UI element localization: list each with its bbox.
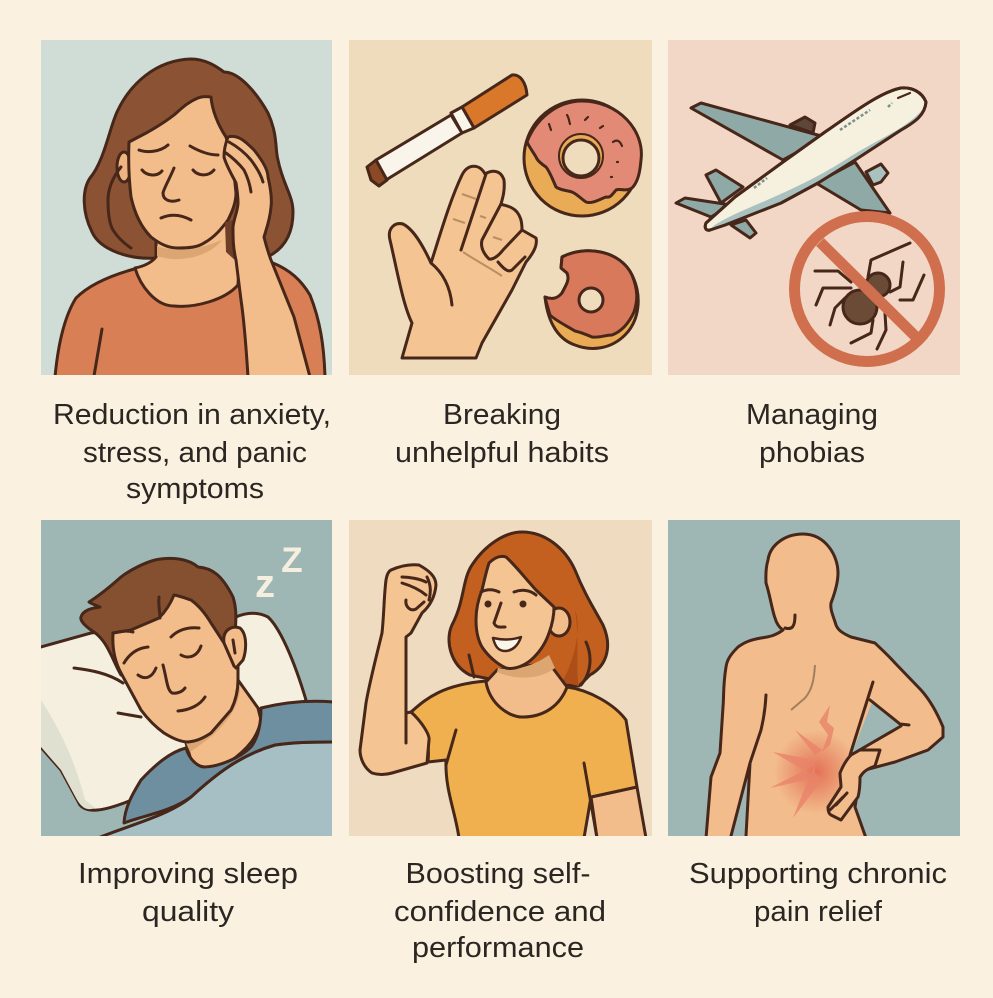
icon: hair shadow xyxy=(562,610,579,686)
label: pain: pain relief xyxy=(754,896,883,928)
text: zzz: Z xyxy=(281,541,303,580)
icon: arm right xyxy=(591,787,646,838)
icon: body xyxy=(706,534,943,838)
shadow: neck xyxy=(186,680,240,752)
icon: torso lines xyxy=(731,615,909,836)
icon: neck xyxy=(186,680,261,767)
text: zzz xyxy=(256,548,302,597)
icon: face xyxy=(113,595,238,742)
icon: cigarette xyxy=(367,75,527,186)
panel: habits xyxy=(349,40,652,375)
label: phobias xyxy=(746,399,878,469)
icon: airplane xyxy=(676,88,926,238)
label: pain xyxy=(689,858,947,928)
shadow: neck xyxy=(497,655,555,678)
icon: pillow creases xyxy=(74,668,141,717)
icon: neck xyxy=(486,663,567,717)
label: pain: Supporting chronic xyxy=(689,858,947,890)
label: phobias: Managing xyxy=(746,399,878,431)
shadow: under chin xyxy=(157,240,222,259)
icon: hand on hip xyxy=(828,750,880,820)
label: sleep xyxy=(78,858,298,928)
icon: finger lines xyxy=(431,174,525,305)
shadow: pillow xyxy=(41,700,95,809)
label: sleep: Improving sleep xyxy=(78,858,298,890)
icon: hair xyxy=(81,558,236,675)
label: habits: unhelpful habits xyxy=(395,437,609,469)
label: habits: Breaking xyxy=(443,399,561,431)
icon: underarm gap xyxy=(851,700,901,755)
icon: facial features xyxy=(94,145,218,376)
icon: hair sliver xyxy=(225,220,234,260)
icon: donut top xyxy=(524,100,641,216)
icon: face details xyxy=(469,590,590,685)
panel: phobias xyxy=(668,40,960,375)
icon: pillow xyxy=(30,613,306,810)
icon: hand xyxy=(389,166,536,358)
panel: pain xyxy=(668,520,960,838)
icon: ear xyxy=(548,608,570,636)
icon: hair xyxy=(84,59,293,262)
icon: shirt xyxy=(55,263,325,377)
icon: hand finger lines xyxy=(830,793,847,810)
panel: sleep xyxy=(30,520,334,840)
label: phobias: phobias xyxy=(759,437,865,469)
glow: pain burst xyxy=(770,705,858,818)
icon: shirt fold lines xyxy=(446,730,597,838)
label: confidence: performance xyxy=(412,932,584,964)
icon: hair strand xyxy=(108,167,131,248)
icon: raised arm with fist xyxy=(360,565,436,774)
label: sleep: quality xyxy=(142,896,235,928)
icon: shirt xyxy=(411,681,637,838)
icon: hair fringe lines xyxy=(113,597,160,633)
label: habits xyxy=(395,399,609,469)
text: zzz: z xyxy=(255,562,275,606)
icon: no spider sign xyxy=(794,216,940,362)
icon: face xyxy=(476,556,554,668)
icon: faint spine line xyxy=(791,665,815,710)
panel: anxiety xyxy=(41,40,332,377)
label: anxiety: Reduction in anxiety, xyxy=(53,399,331,431)
icon: sleeping face details xyxy=(124,628,235,711)
icon: face xyxy=(129,97,236,248)
label: confidence xyxy=(394,858,606,964)
icon: bitten donut xyxy=(545,251,638,348)
icon: ear xyxy=(117,152,131,182)
icon: blanket upper xyxy=(124,701,334,823)
icon: fist lines xyxy=(402,577,430,743)
icon: blanket lower xyxy=(98,742,334,840)
label: anxiety: symptoms xyxy=(126,473,264,505)
icon: ear xyxy=(224,627,246,668)
icon: neck xyxy=(135,222,240,306)
label: anxiety xyxy=(53,399,331,505)
label: anxiety: stress, and panic xyxy=(83,437,307,469)
panel: confidence xyxy=(349,520,652,838)
icon: hand and arm xyxy=(224,136,310,377)
icon: arm gap xyxy=(731,763,750,838)
label: confidence: Boosting self- xyxy=(406,858,590,890)
label: confidence: confidence and xyxy=(394,896,606,928)
icon: hair xyxy=(449,532,608,686)
icon: finger lines xyxy=(226,142,263,192)
